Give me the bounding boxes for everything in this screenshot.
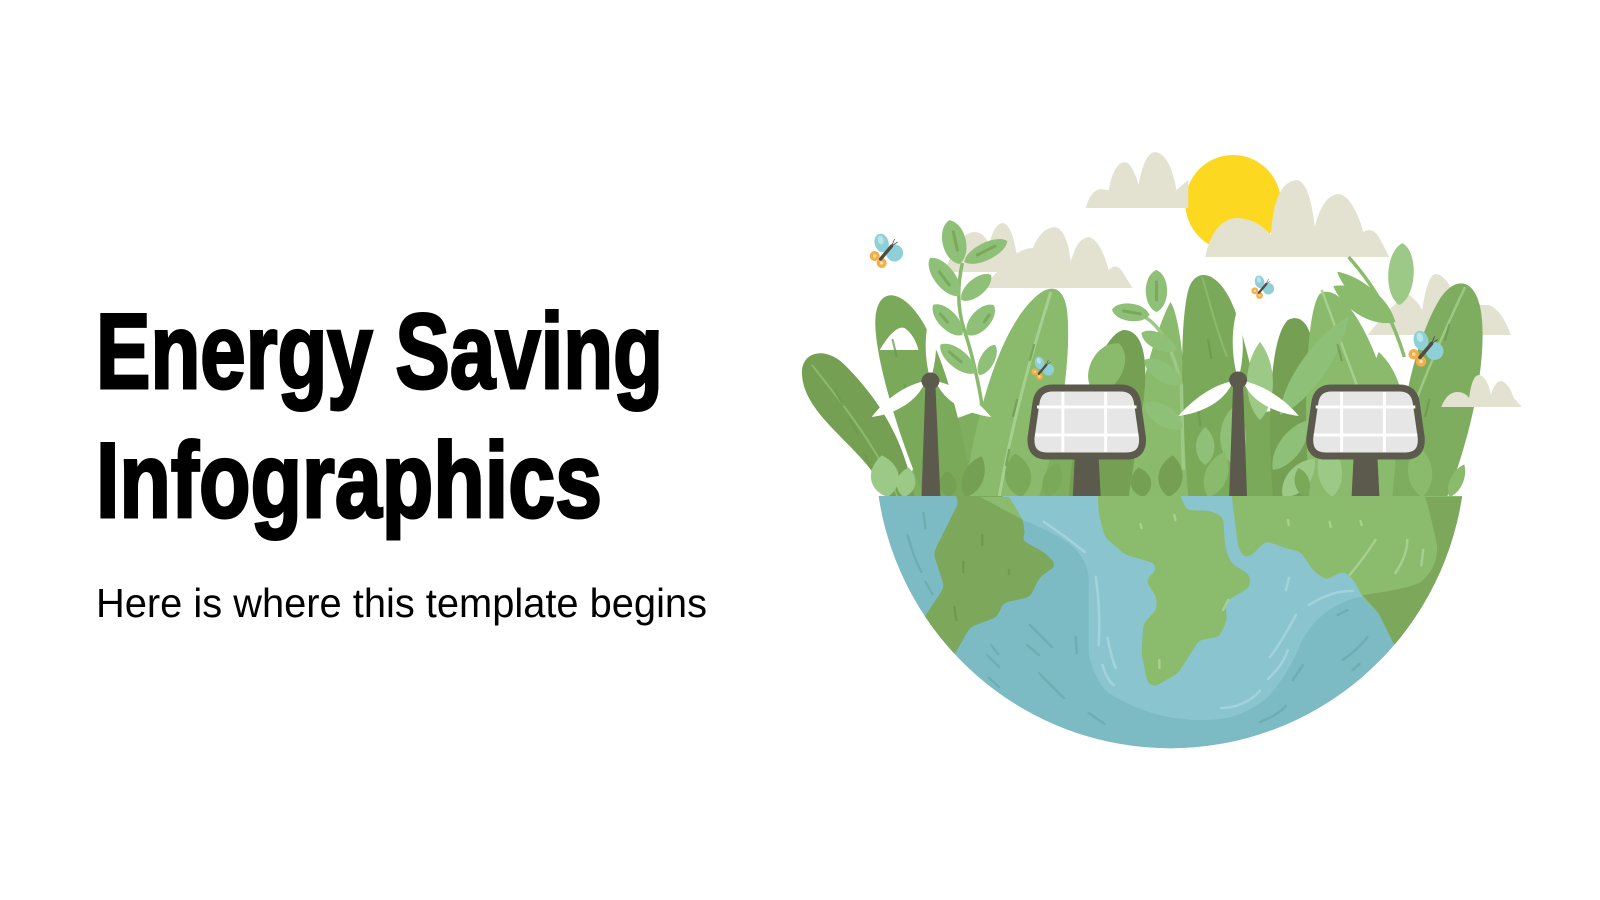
light ocean strokes [1044,522,1353,708]
eurasia shade [1362,497,1462,645]
leaf dashes [835,325,1449,470]
americas [925,496,1054,654]
land strokes [1141,515,1423,668]
right sprig [1331,242,1415,357]
large leaves [802,275,1483,497]
illustration: half globe with plants [802,152,1522,760]
eurasia [1232,496,1462,644]
title: Energy Saving [96,291,663,411]
butterfly centre [1251,274,1274,299]
butterfly near panel [1031,355,1054,380]
butterfly top left [870,232,903,268]
title: Infographics [96,420,602,540]
base foliage mass [905,400,1447,497]
africa [1098,496,1250,686]
slide [99,152,1522,748]
globe [878,496,1462,748]
clouds behind plants [944,152,1511,335]
foreground small leaves [868,440,1470,504]
small cloud right [1441,375,1522,407]
butterfly right [1408,329,1443,367]
ocean [878,496,1462,748]
solar panel left [1031,388,1143,497]
solar panel right [1310,388,1421,497]
sun [1185,155,1281,251]
title [96,291,663,540]
dark ocean strokes [908,513,1368,724]
land dashes [954,535,1009,620]
left sprig [922,218,1011,497]
centre sprig [1111,270,1318,477]
wind turbine left [872,310,991,497]
wind turbine right [1178,310,1299,497]
subtitle: Here is where this template begins [96,580,707,626]
ocean shade [878,496,1433,748]
